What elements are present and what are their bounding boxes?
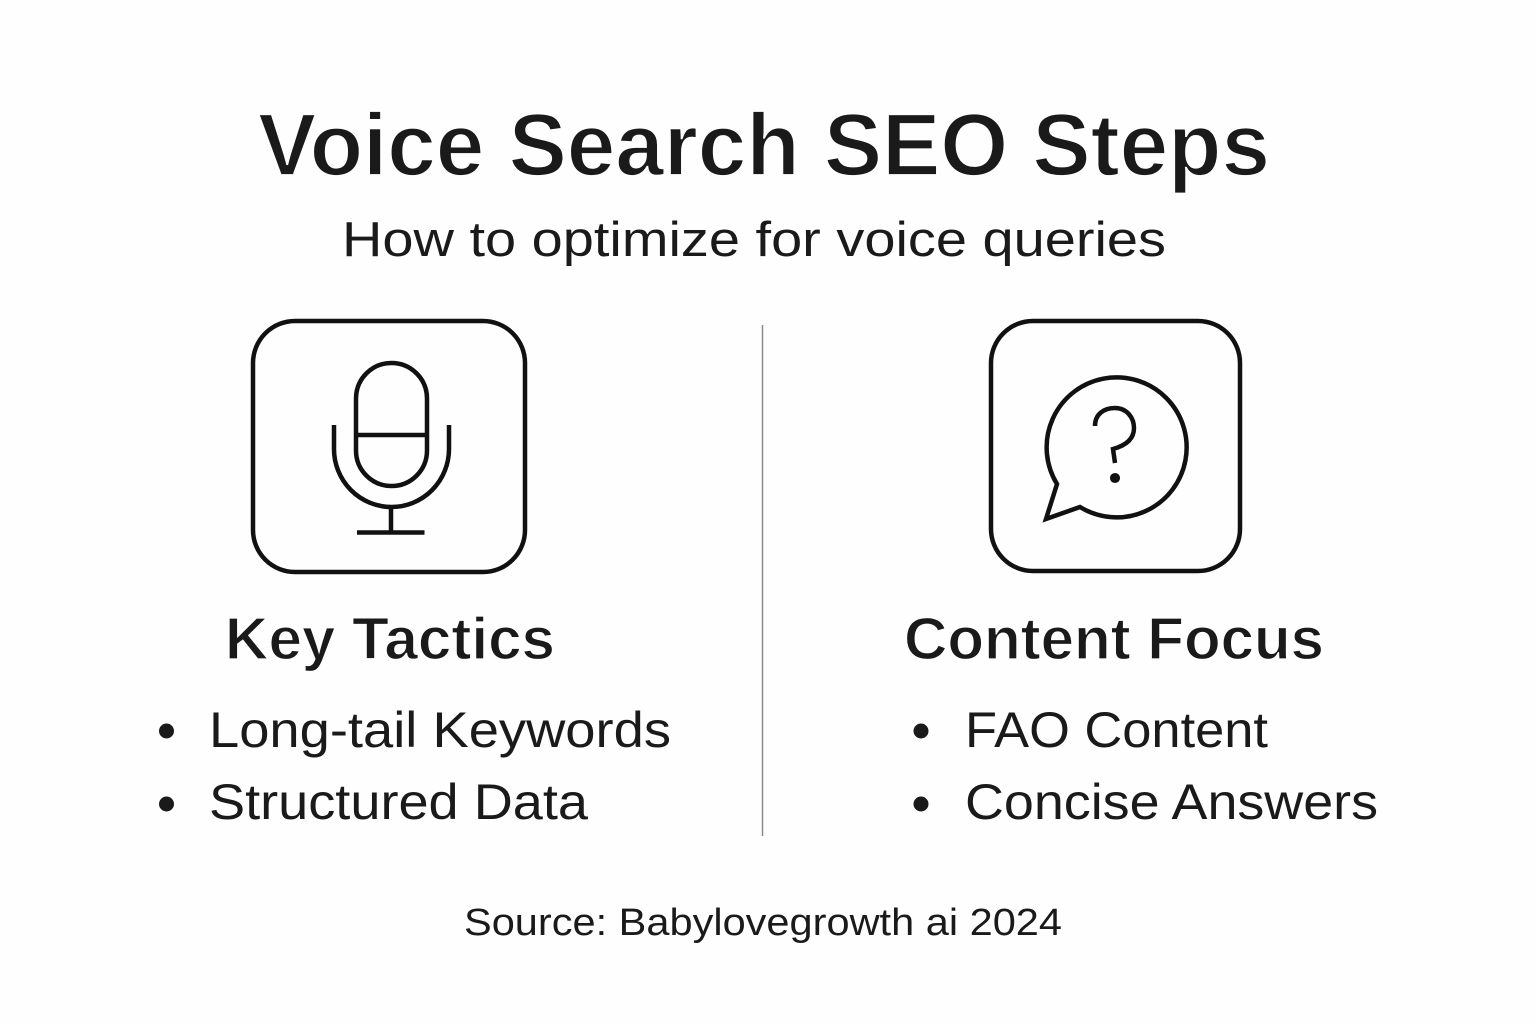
subtitle: How to optimize for voice queries <box>342 213 1166 267</box>
list: key tactics: Structured Data <box>209 774 588 830</box>
title: Voice Search SEO Steps <box>258 95 1270 194</box>
list: content focus <box>914 702 1378 830</box>
icon: question speech bubble <box>991 321 1240 571</box>
list: key tactics <box>159 702 671 830</box>
heading: key tactics: Key Tactics <box>225 606 555 672</box>
source note: Source: Babylovegrowth ai 2024 <box>464 902 1062 944</box>
list: content focus: FAO Content <box>965 702 1268 758</box>
divider between columns <box>762 325 764 836</box>
panel: key tactics <box>159 321 671 830</box>
panel: content focus <box>904 321 1378 830</box>
list: content focus: Concise Answers <box>965 774 1378 830</box>
list: key tactics: Long-tail Keywords <box>209 702 671 758</box>
heading: content focus: Content Focus <box>904 606 1324 672</box>
icon: microphone <box>253 321 525 572</box>
